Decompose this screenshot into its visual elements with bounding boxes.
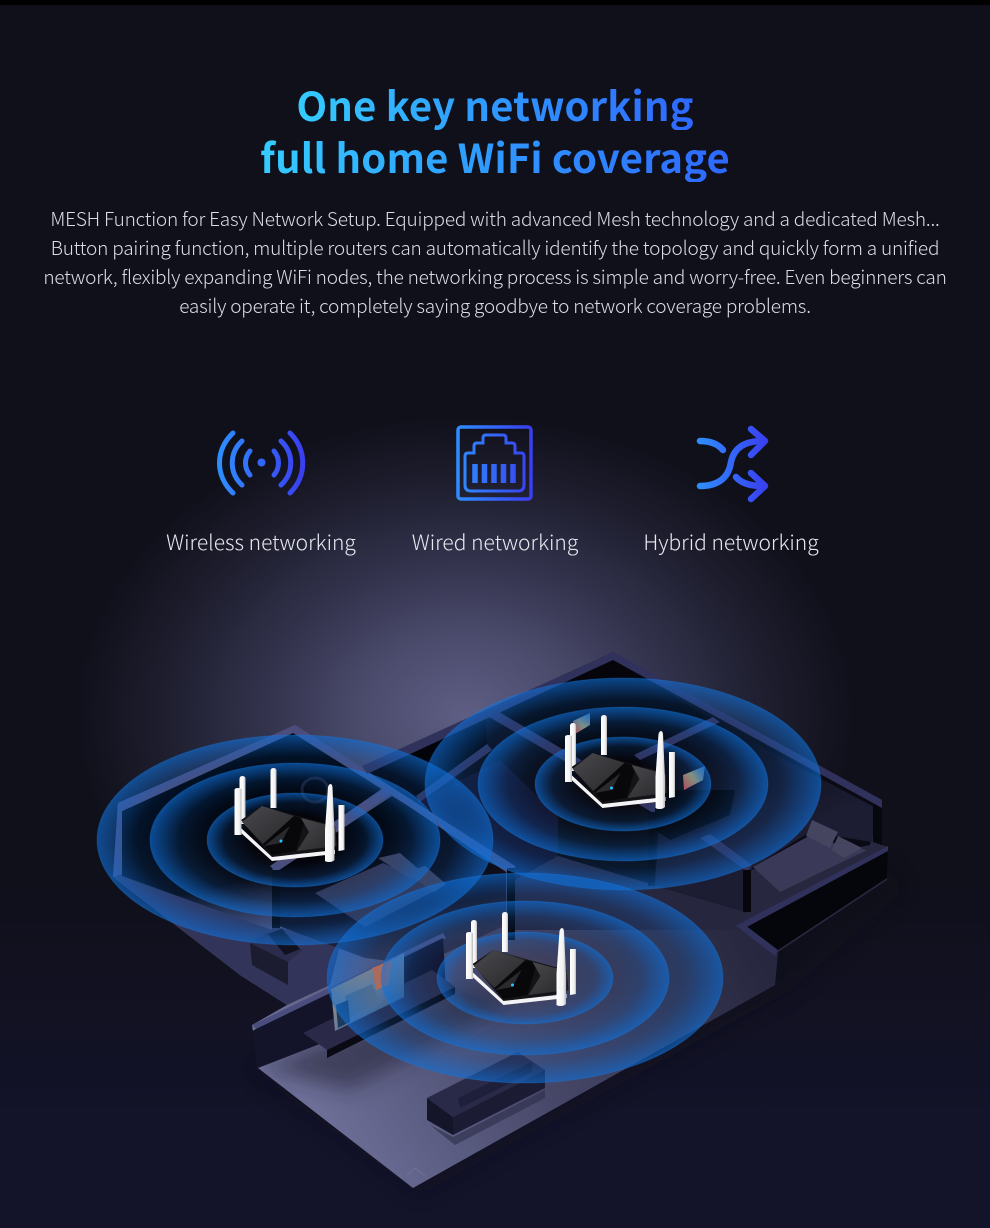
rings: router three bbox=[327, 873, 723, 1083]
left room interior bbox=[122, 733, 383, 930]
wall tops bbox=[113, 725, 515, 1031]
description text bbox=[43, 205, 947, 319]
desk with laptop bbox=[250, 932, 303, 962]
description text: Button pairing function, multiple routers can automatically identify the topology and quickly form a unified bbox=[51, 234, 939, 261]
interior wall posts bbox=[272, 812, 751, 940]
rings: router two bbox=[425, 678, 821, 890]
chair bbox=[302, 778, 328, 802]
floor corner line bbox=[407, 1168, 425, 1176]
back right rooms bbox=[500, 660, 713, 806]
sofa in right room bbox=[753, 837, 867, 892]
bedroom interior bbox=[276, 796, 506, 965]
label: hybrid: Hybrid networking bbox=[643, 527, 819, 557]
exterior right wall face bbox=[737, 849, 888, 950]
description text: MESH Function for Easy Network Setup. Equipped with advanced Mesh technology and a dedicated Mesh... bbox=[50, 205, 940, 232]
sofa seat bbox=[427, 1052, 545, 1117]
room monitors bbox=[573, 713, 590, 734]
rings: router one bbox=[97, 735, 493, 945]
router two bbox=[565, 715, 675, 809]
label: wireless: Wireless networking bbox=[166, 527, 356, 557]
router three bbox=[466, 912, 576, 1006]
description text: network, flexibly expanding WiFi nodes, the networking process is simple and worry-free. Even beginners can bbox=[43, 263, 947, 290]
plan floor base bbox=[113, 652, 888, 1188]
router one bbox=[234, 768, 344, 862]
plan shadow bbox=[250, 860, 905, 1195]
rear sofa bbox=[427, 1052, 545, 1145]
icon: ethernet port bbox=[458, 427, 531, 499]
wifi coverage rings bbox=[97, 678, 821, 1083]
floor shadow by TV wall bbox=[258, 985, 520, 1090]
bed bbox=[315, 863, 440, 927]
sofa front bbox=[427, 1098, 453, 1135]
TV stand bbox=[303, 970, 455, 1050]
bedside pillows bbox=[378, 853, 422, 880]
rear antennas bbox=[240, 776, 246, 824]
TV screen bbox=[331, 953, 404, 1031]
label: wired: Wired networking bbox=[412, 527, 578, 557]
sofa back bbox=[458, 1062, 532, 1108]
title: full home WiFi coverage bbox=[260, 127, 730, 185]
description text: easily operate it, completely saying goodbye to network coverage problems. bbox=[179, 292, 811, 319]
router body bbox=[241, 806, 337, 857]
title: One key networking bbox=[296, 75, 694, 133]
cushions bbox=[806, 820, 838, 848]
TV wall bbox=[252, 938, 446, 1068]
icon row bbox=[217, 425, 768, 502]
icon: hybrid shuffle arrows bbox=[700, 429, 765, 499]
white rim bbox=[240, 828, 335, 861]
upper right dark base bbox=[362, 655, 880, 915]
title bbox=[260, 75, 730, 185]
icon: wireless signal bbox=[220, 433, 303, 493]
front antennas bbox=[234, 788, 242, 835]
